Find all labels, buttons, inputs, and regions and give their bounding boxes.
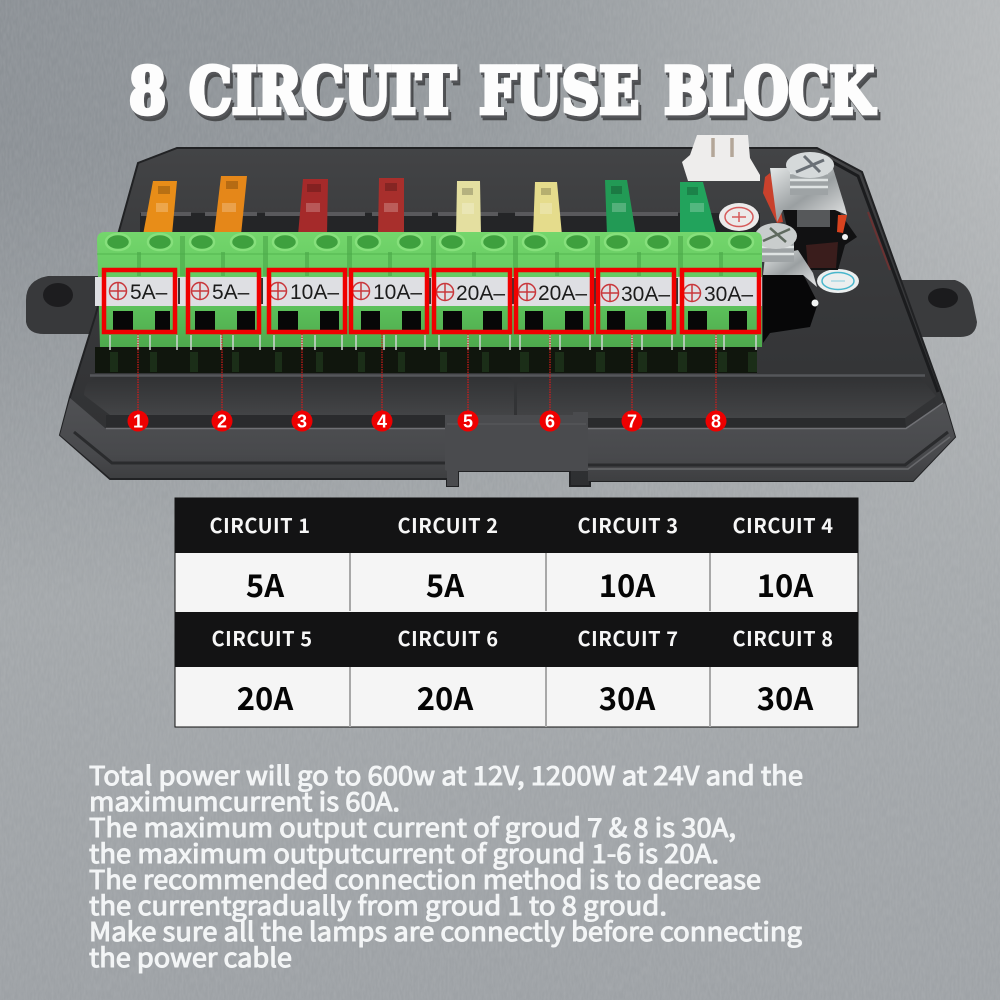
title [129, 54, 876, 129]
description text: Make sure all the lamps are connectly before connecting [89, 912, 802, 949]
description text [89, 756, 803, 975]
tray: left [84, 377, 514, 415]
terminal block [95, 232, 762, 373]
label 2 [192, 281, 250, 304]
fuse 4 10A red [378, 178, 404, 235]
label 1: 5A– [130, 281, 168, 304]
label 8: 30A– [704, 283, 753, 306]
row 1 headers: CIRCUIT 2 [398, 510, 498, 539]
marker 6 [540, 410, 560, 432]
negative terminal bolt [755, 223, 818, 343]
row 1 values: 5A [246, 561, 284, 606]
numbered markers [128, 410, 726, 432]
marker 2 [212, 410, 232, 432]
row 2 values: 20A [237, 674, 293, 719]
tray: right [517, 377, 936, 418]
marker 2: 2 [217, 412, 227, 432]
red highlight boxes [104, 270, 759, 332]
label 6: 20A– [538, 282, 587, 305]
label 3: 10A– [290, 281, 339, 304]
white connector [682, 135, 760, 181]
marker 8: 8 [711, 412, 721, 432]
marker 7: 7 [627, 412, 637, 432]
row 1 values: 10A [757, 561, 813, 606]
label 4: 10A– [373, 281, 422, 304]
fuse 3 10A red [298, 179, 328, 235]
positive polarity sticker [719, 203, 759, 231]
row 2 headers: CIRCUIT 8 [732, 623, 834, 652]
metal pins [110, 335, 756, 350]
screw holes [106, 234, 753, 250]
label 5: 20A– [456, 282, 505, 305]
title: FUSE [479, 54, 639, 129]
row 1 headers [210, 510, 834, 539]
fuse 5 20A yellow [456, 181, 481, 235]
amperage labels [110, 281, 753, 306]
wire slots [113, 311, 747, 331]
description text: maximumcurrent is 60A. [89, 782, 400, 819]
row 2 values: 20A [417, 674, 473, 719]
marker 1: 1 [133, 412, 143, 432]
description text: The recommended connection method is to decrease [89, 860, 761, 897]
description text: the power cable [89, 938, 292, 975]
leader lines [138, 334, 716, 412]
marker 3: 3 [297, 412, 307, 432]
fuse 6 20A yellow [533, 182, 562, 235]
socket row [140, 213, 760, 235]
row 1 values [246, 561, 813, 606]
row 2 values: 30A [599, 674, 655, 719]
housing base [60, 148, 955, 486]
marker 4 [372, 410, 392, 432]
positive terminal bolt [763, 152, 857, 270]
fuse block product illustration [26, 135, 977, 486]
description text: Total power will go to 600w at 12V, 1200W at 24V and the [89, 756, 803, 793]
marker 7 [622, 410, 642, 432]
fuses [143, 176, 716, 236]
title: CIRCUIT [189, 54, 456, 129]
marker 1 [128, 410, 148, 432]
title: 8 [129, 54, 166, 129]
center tab [445, 412, 588, 486]
row 2 headers: CIRCUIT 6 [398, 623, 498, 652]
description text: the maximum outputcurrent of ground 1-6 is 20A. [89, 834, 719, 871]
title: BLOCK [664, 54, 876, 129]
row 2 headers: CIRCUIT 7 [578, 623, 678, 652]
label 2: 5A– [212, 281, 250, 304]
label 7: 30A– [621, 283, 670, 306]
fuse 1 5A orange [143, 181, 177, 235]
marker 6: 6 [545, 412, 555, 432]
row 1 values: 10A [599, 561, 655, 606]
lower rim [60, 398, 447, 478]
label 1 [110, 281, 168, 304]
row 1 headers: CIRCUIT 1 [210, 510, 310, 539]
row 1 headers: CIRCUIT 4 [732, 510, 834, 539]
marker 5: 5 [463, 412, 473, 432]
row 1 values: 5A [426, 561, 464, 606]
fuse 7 30A green [605, 180, 636, 235]
circuit rating table [175, 498, 858, 727]
marker 3 [292, 410, 312, 432]
row 2 values [237, 674, 813, 719]
row 2 headers: CIRCUIT 5 [212, 623, 312, 652]
fuse 2 5A orange [214, 176, 247, 235]
row 2 values: 30A [757, 674, 813, 719]
description text: The maximum output current of groud 7 & 8 is 30A, [89, 808, 736, 845]
negative polarity sticker [817, 269, 859, 293]
mounting ear: left [26, 276, 105, 334]
mounting ear: right [900, 280, 977, 337]
label strip [95, 277, 762, 306]
row 1 headers: CIRCUIT 3 [578, 510, 678, 539]
row 2 headers [212, 623, 834, 652]
description text: the currentgradually from groud 1 to 8 groud. [89, 886, 667, 923]
fuse 8 30A green [680, 182, 716, 236]
marker 4: 4 [377, 412, 387, 432]
marker 5 [458, 410, 478, 432]
marker 8 [706, 410, 726, 432]
